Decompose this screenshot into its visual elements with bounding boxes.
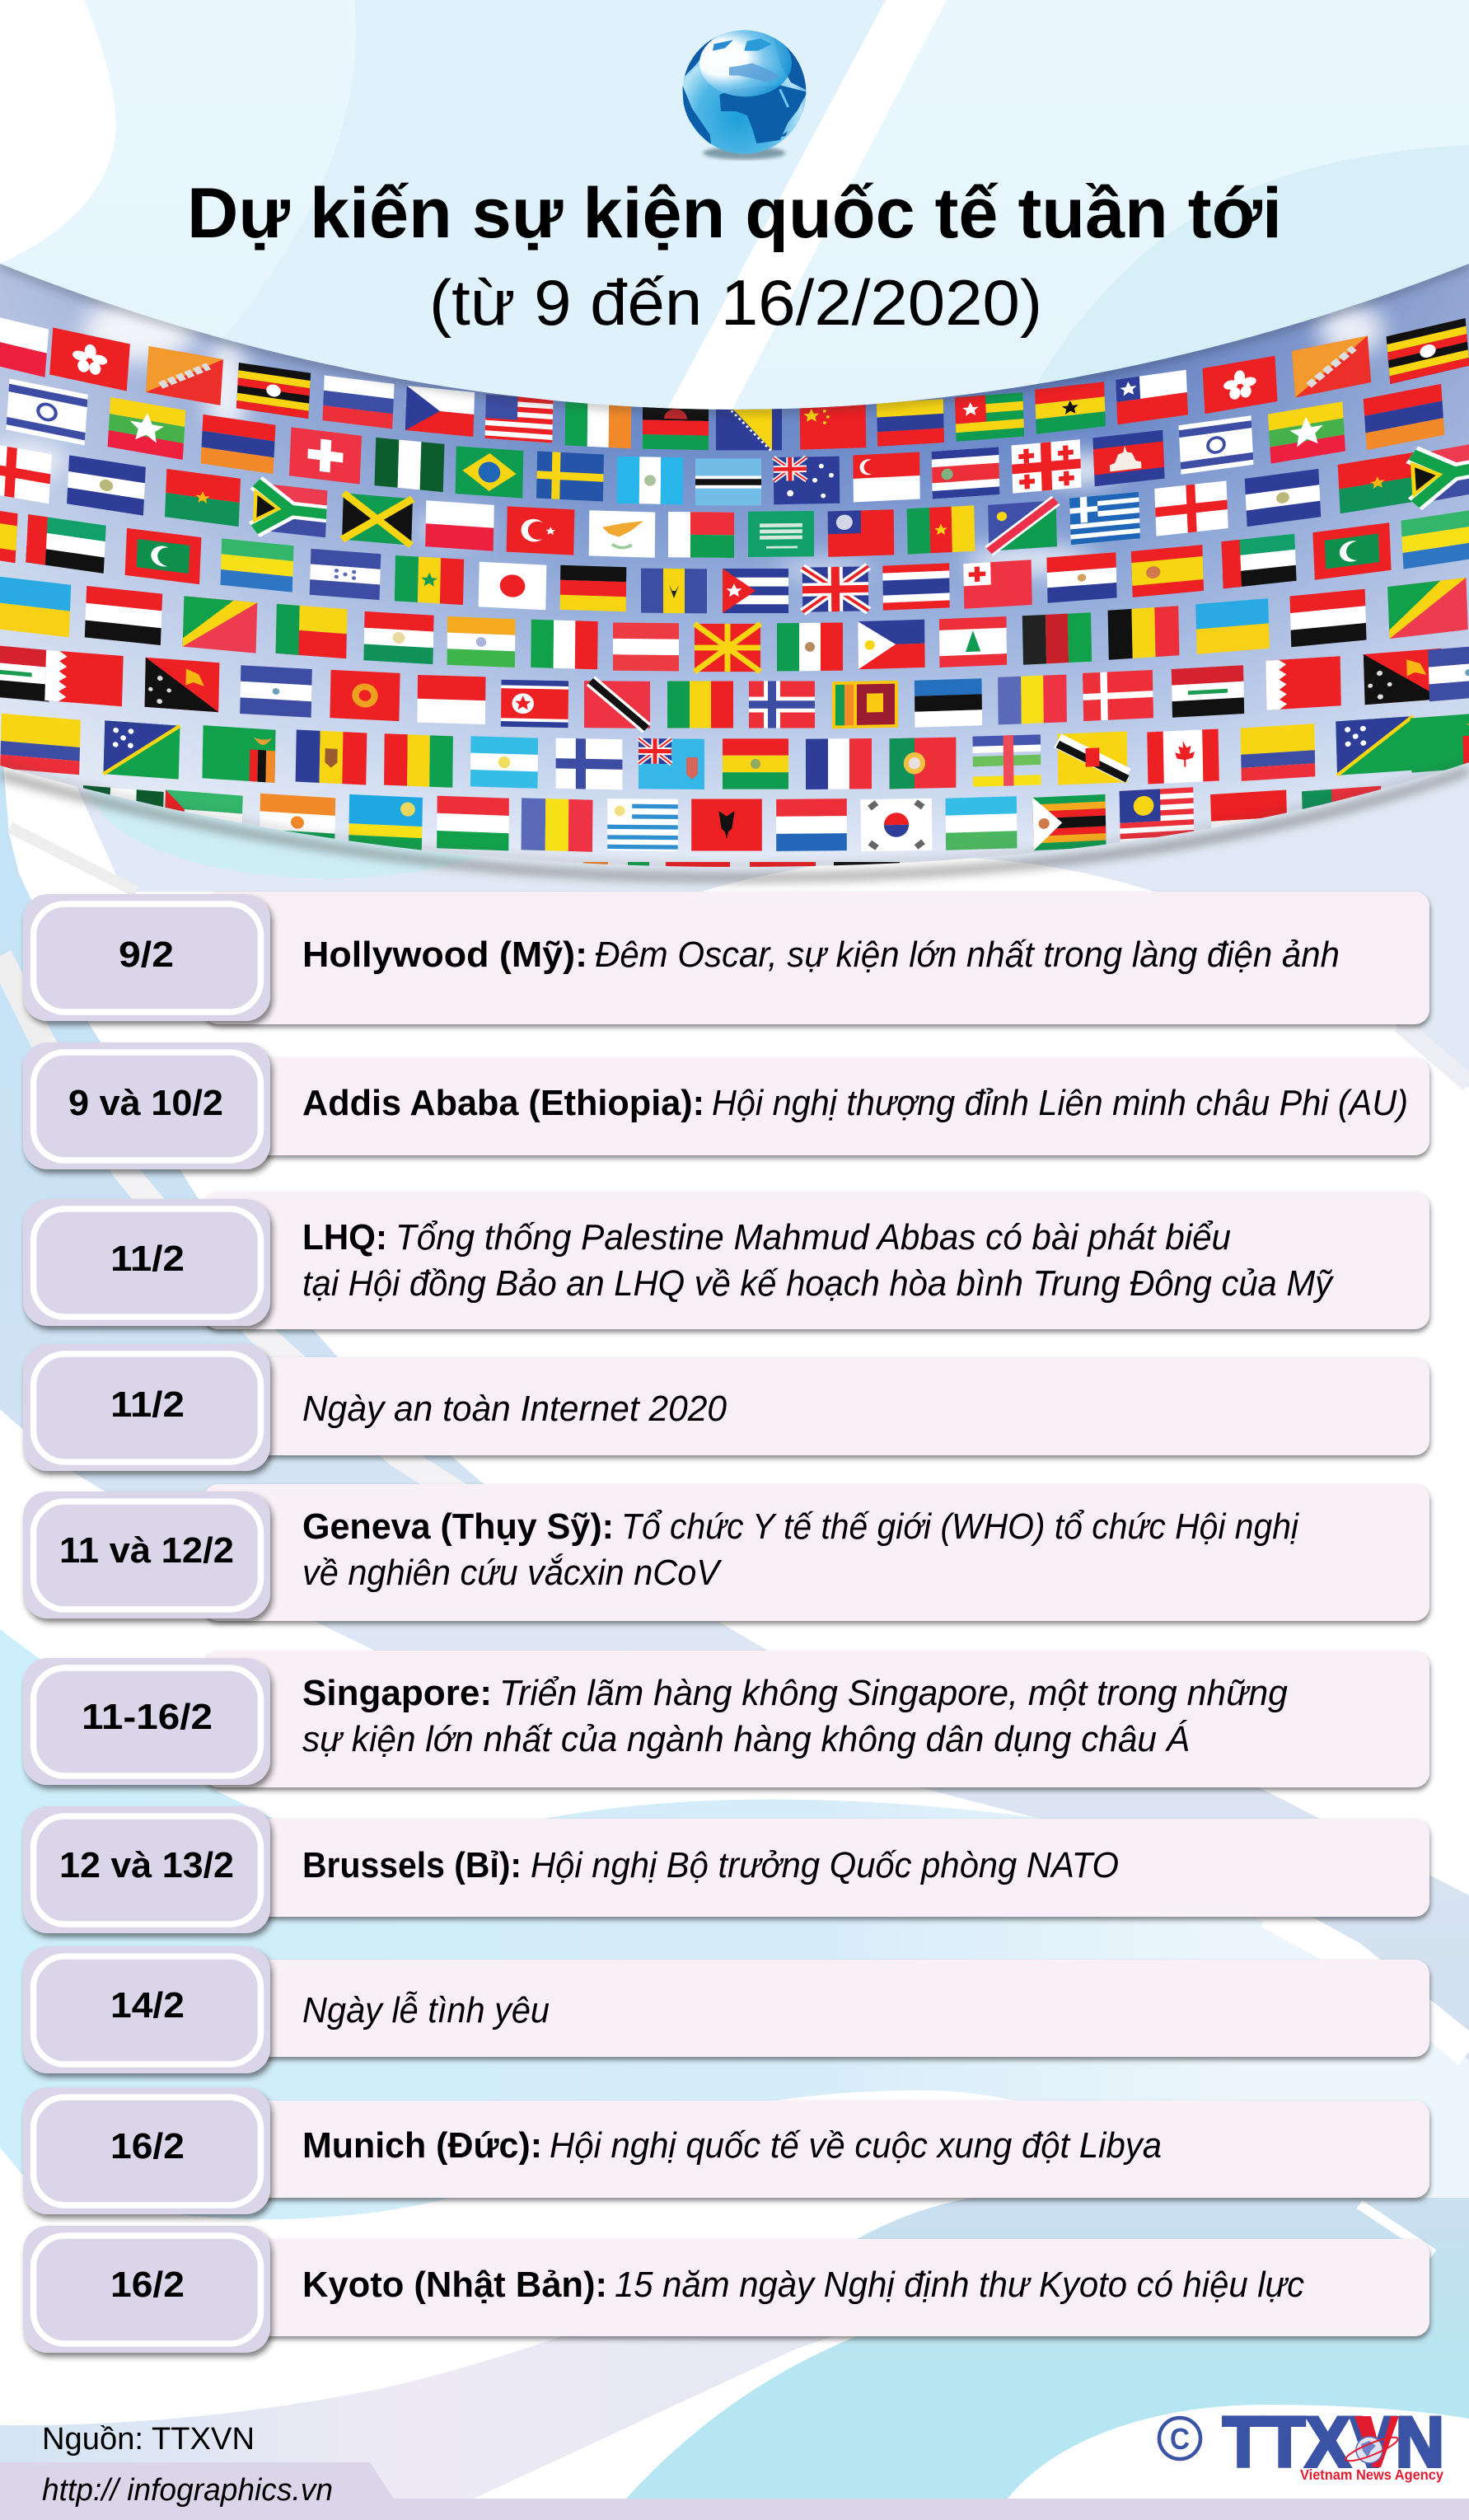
event text bbox=[302, 1217, 1335, 1304]
event text: Ngày lễ tình yêu bbox=[302, 1990, 550, 2031]
date badge bbox=[23, 894, 270, 1021]
logo: TTXVN: Vietnam News Agency bbox=[1300, 2466, 1443, 2483]
row 1: Hollywood bbox=[23, 892, 1429, 1024]
date badge: 11 và 12/2 bbox=[59, 1530, 234, 1571]
event text: Hội nghị Bộ trưởng Quốc phòng NATO bbox=[531, 1845, 1119, 1885]
title: Dự kiến sự kiện quốc tế tuần tới bbox=[187, 174, 1282, 253]
icon: globe bbox=[681, 30, 813, 160]
row 3: LHQ bbox=[23, 1192, 1429, 1329]
band shadow bbox=[0, 766, 1469, 882]
event text: Hội nghị thượng đỉnh Liên minh châu Phi (AU) bbox=[712, 1083, 1408, 1123]
date badge bbox=[23, 1806, 270, 1933]
event panel bbox=[204, 1357, 1429, 1455]
copyright mark: C bbox=[1170, 2422, 1190, 2456]
flags band bbox=[0, 247, 1469, 890]
row 5: Geneva bbox=[23, 1484, 1429, 1621]
date badge bbox=[23, 2226, 270, 2353]
event text bbox=[302, 1083, 1408, 1123]
event text bbox=[302, 1506, 1299, 1593]
row 2: Addis Ababa bbox=[23, 1042, 1429, 1169]
date badge: 12 và 13/2 bbox=[59, 1845, 234, 1885]
event text: 15 năm ngày Nghị định thư Kyoto có hiệu lực bbox=[615, 2265, 1304, 2305]
date badge: 16/2 bbox=[110, 2126, 185, 2166]
event panel bbox=[204, 1960, 1429, 2057]
event text: Triển lãm hàng không Singapore, một trong những bbox=[499, 1673, 1289, 1713]
date badge bbox=[23, 1344, 270, 1471]
row 6: Singapore bbox=[23, 1651, 1429, 1787]
date badge bbox=[23, 1199, 270, 1326]
event panel bbox=[204, 1192, 1429, 1329]
date badge: 11-16/2 bbox=[82, 1697, 213, 1737]
source text: Nguồn: TTXVN bbox=[42, 2422, 255, 2457]
event text bbox=[302, 934, 1340, 975]
event text bbox=[302, 1845, 1119, 1885]
event text: Ngày an toàn Internet 2020 bbox=[302, 1389, 727, 1429]
row 9: Munich bbox=[23, 2087, 1429, 2214]
event text: Hội nghị quốc tế về cuộc xung đột Libya bbox=[550, 2125, 1162, 2166]
row 8: Valentine bbox=[23, 1946, 1429, 2073]
event text: Geneva (Thụy Sỹ): bbox=[302, 1506, 614, 1547]
date badge: 9 và 10/2 bbox=[68, 1083, 223, 1123]
date badge: 16/2 bbox=[110, 2265, 185, 2305]
date badge: 9/2 bbox=[119, 934, 174, 975]
event panel bbox=[204, 2239, 1429, 2336]
event text: sự kiện lớn nhất của ngành hàng không dân dụng châu Á bbox=[302, 1719, 1190, 1759]
row 4: Internet safety day bbox=[23, 1344, 1429, 1471]
logo: TTXVN: TTXVN bbox=[1223, 2403, 1444, 2482]
event text bbox=[302, 2265, 1304, 2305]
event panel bbox=[204, 892, 1429, 1024]
row 7: Brussels bbox=[23, 1806, 1429, 1933]
event text bbox=[302, 2125, 1162, 2166]
subtitle: (từ 9 đến 16/2/2020) bbox=[429, 266, 1042, 339]
event text: Munich (Đức): bbox=[302, 2125, 542, 2166]
date badge bbox=[23, 1946, 270, 2073]
event text: Addis Ababa (Ethiopia): bbox=[302, 1083, 704, 1123]
date badge bbox=[23, 1492, 270, 1618]
event panel bbox=[204, 1057, 1429, 1155]
footer bar bbox=[0, 2462, 1469, 2520]
event text: LHQ: bbox=[302, 1217, 387, 1258]
event panel bbox=[204, 1819, 1429, 1917]
event text: Kyoto (Nhật Bản): bbox=[302, 2265, 607, 2305]
date badge bbox=[23, 1658, 270, 1785]
event panel bbox=[204, 1484, 1429, 1621]
event panel bbox=[204, 2101, 1429, 2198]
event text: Tổ chức Y tế thế giới (WHO) tổ chức Hội nghị bbox=[621, 1506, 1299, 1547]
event panel bbox=[204, 1651, 1429, 1787]
event text: tại Hội đồng Bảo an LHQ về kế hoạch hòa bình Trung Đông của Mỹ bbox=[302, 1263, 1335, 1304]
row 10: Kyoto bbox=[23, 2226, 1429, 2353]
event text bbox=[302, 1673, 1289, 1759]
event text: Brussels (Bỉ): bbox=[302, 1845, 522, 1885]
event text: Đêm Oscar, sự kiện lớn nhất trong làng điện ảnh bbox=[595, 934, 1340, 975]
date badge: 11/2 bbox=[110, 1239, 185, 1279]
date badge: 14/2 bbox=[110, 1985, 185, 2026]
date badge bbox=[23, 1042, 270, 1169]
event text: Singapore: bbox=[302, 1673, 492, 1713]
date badge: 11/2 bbox=[110, 1384, 185, 1425]
website url: http:// infographics.vn bbox=[42, 2473, 333, 2508]
event text: Tổng thống Palestine Mahmud Abbas có bài phát biểu bbox=[395, 1217, 1231, 1258]
event text: Hollywood (Mỹ): bbox=[302, 934, 587, 975]
event text: về nghiên cứu vắcxin nCoV bbox=[302, 1553, 722, 1593]
date badge bbox=[23, 2087, 270, 2214]
copyright mark bbox=[1159, 2418, 1200, 2459]
